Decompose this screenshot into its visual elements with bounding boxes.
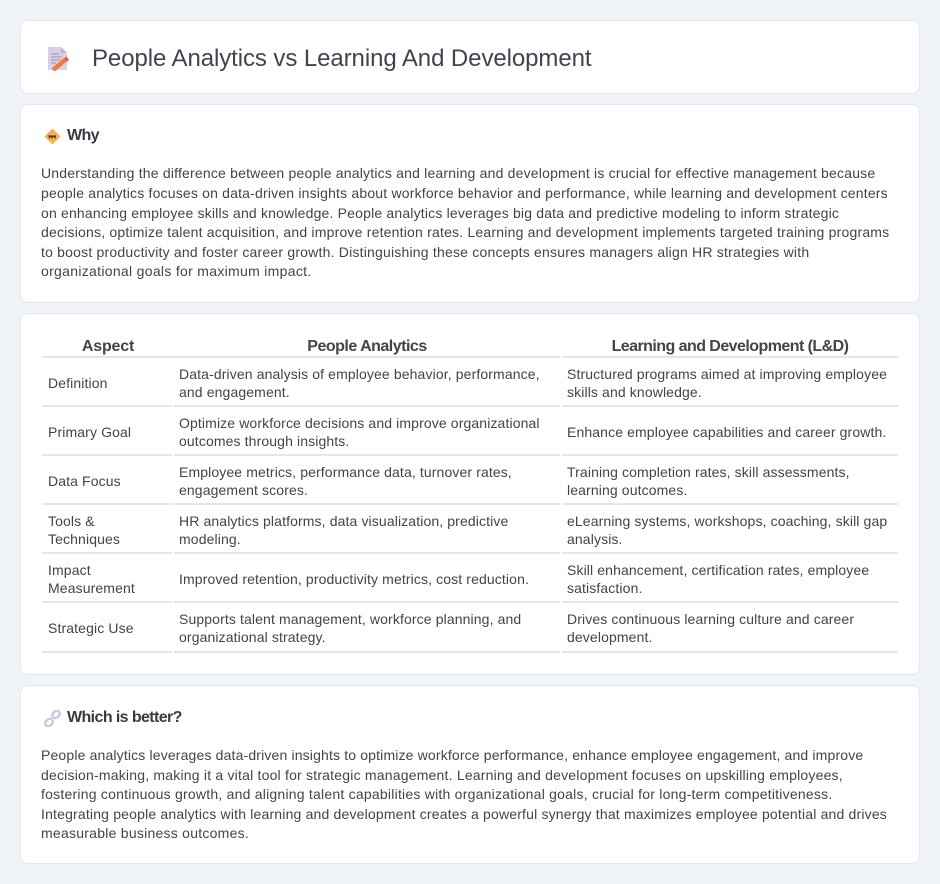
impact: learning and development: Skill enhancement, certification rates, employee xyxy=(567,562,869,578)
definition: learning and development xyxy=(567,366,887,400)
table header: people analytics: People Analytics xyxy=(307,338,427,355)
panel: title card xyxy=(20,20,920,94)
strategic use: learning and development: Drives continuous learning culture and career xyxy=(567,611,854,627)
row: impact measurement: Impact xyxy=(48,562,91,578)
panel: which is better xyxy=(20,685,920,864)
impact: learning and development: satisfaction. xyxy=(567,580,642,596)
text block: which is better: decision-making, making it a vital tool for strategic management. Learning and development focuses on upskilling employees, xyxy=(41,767,843,783)
text block: why xyxy=(41,165,889,279)
data focus: people analytics: Employee metrics, performance data, turnover rates, xyxy=(179,464,512,480)
title: People Analytics vs Learning And Development xyxy=(92,45,591,72)
row: primary goal: Primary Goal xyxy=(48,424,131,440)
text block: why: people analytics focuses on data-driven insights about workforce behavior and performance, while learning and development centers xyxy=(41,185,888,201)
data focus: learning and development: learning outcomes. xyxy=(567,482,687,498)
definition: people analytics xyxy=(179,366,540,400)
impact: people analytics: Improved retention, productivity metrics, cost reduction. xyxy=(179,571,529,587)
heading: why: Why xyxy=(67,127,99,144)
data focus: people analytics xyxy=(179,464,512,498)
row: impact measurement: Measurement xyxy=(48,580,135,596)
table header: learning and development xyxy=(562,337,898,358)
strategic use: people analytics: Supports talent management, workforce planning, and xyxy=(179,611,521,627)
text block: why: to boost productivity and foster career growth. Distinguishing these concepts ensures managers align HR strategies with xyxy=(41,244,809,260)
strategic use: people analytics: organizational strategy. xyxy=(179,629,326,645)
table header: people analytics xyxy=(174,337,560,358)
row: tools and techniques: Techniques xyxy=(48,531,120,547)
data focus: people analytics: engagement scores. xyxy=(179,482,308,498)
strategic use: people analytics xyxy=(179,611,521,645)
text block: which is better: measurable business outcomes. xyxy=(41,825,249,841)
primary goal: people analytics xyxy=(179,415,540,449)
table header: aspect xyxy=(42,337,174,358)
text block: why: organizational goals for maximum impact. xyxy=(41,263,312,279)
row: impact measurement xyxy=(48,562,135,596)
text block: why: decisions, optimize talent acquisition, and improve retention rates. Learning and development implements targeted training programs xyxy=(41,224,889,240)
row: definition: Definition xyxy=(48,375,108,391)
table header: aspect: Aspect xyxy=(82,338,134,355)
text block: why: Understanding the difference between people analytics and learning and development is crucial for effective management because xyxy=(41,165,875,181)
text block: which is better: Integrating people analytics with learning and development creates a powerful synergy that maximizes employee potential and drives xyxy=(41,806,887,822)
data focus: learning and development: Training completion rates, skill assessments, xyxy=(567,464,850,480)
definition: learning and development: Structured programs aimed at improving employee xyxy=(567,366,887,382)
tools: learning and development: analysis. xyxy=(567,531,623,547)
icon: document with pencil xyxy=(48,47,69,71)
icon: warning diamond xyxy=(44,128,60,144)
strategic use: learning and development xyxy=(567,611,854,645)
icon: chain link xyxy=(44,710,61,727)
text block: why: on enhancing employee skills and knowledge. People analytics leverages big data and predictive modeling to inform strategic xyxy=(41,205,839,221)
definition: people analytics: and engagement. xyxy=(179,384,290,400)
tools: learning and development: eLearning systems, workshops, coaching, skill gap xyxy=(567,513,887,529)
panel: why xyxy=(20,104,920,303)
tools: people analytics: modeling. xyxy=(179,531,241,547)
tools: learning and development xyxy=(567,513,887,547)
definition: people analytics: Data-driven analysis of employee behavior, performance, xyxy=(179,366,540,382)
primary goal: people analytics: Optimize workforce decisions and improve organizational xyxy=(179,415,540,431)
strategic use: learning and development: development. xyxy=(567,629,652,645)
primary goal: people analytics: outcomes through insights. xyxy=(179,433,349,449)
tools: people analytics: HR analytics platforms, data visualization, predictive xyxy=(179,513,508,529)
row: tools and techniques: Tools & xyxy=(48,513,95,529)
primary goal: learning and development: Enhance employee capabilities and career growth. xyxy=(567,424,886,440)
text block: which is better xyxy=(41,747,887,841)
text block: which is better: fostering continuous growth, and aligning talent capabilities with organizational goals, crucial for long-term competitiveness. xyxy=(41,786,832,802)
data focus: learning and development xyxy=(567,464,850,498)
impact: learning and development xyxy=(567,562,869,596)
row: tools and techniques xyxy=(48,513,120,547)
tools: people analytics xyxy=(179,513,508,547)
definition: learning and development: skills and knowledge. xyxy=(567,384,702,400)
row: strategic use: Strategic Use xyxy=(48,620,134,636)
row: data focus: Data Focus xyxy=(48,473,121,489)
text block: which is better: People analytics leverages data-driven insights to optimize workforce performance, enhance employee engagement, and improve xyxy=(41,747,863,763)
heading: which is better: Which is better? xyxy=(67,709,182,726)
panel: comparison table xyxy=(20,313,920,675)
table header: learning and development: Learning and Development (L&D) xyxy=(612,338,848,355)
